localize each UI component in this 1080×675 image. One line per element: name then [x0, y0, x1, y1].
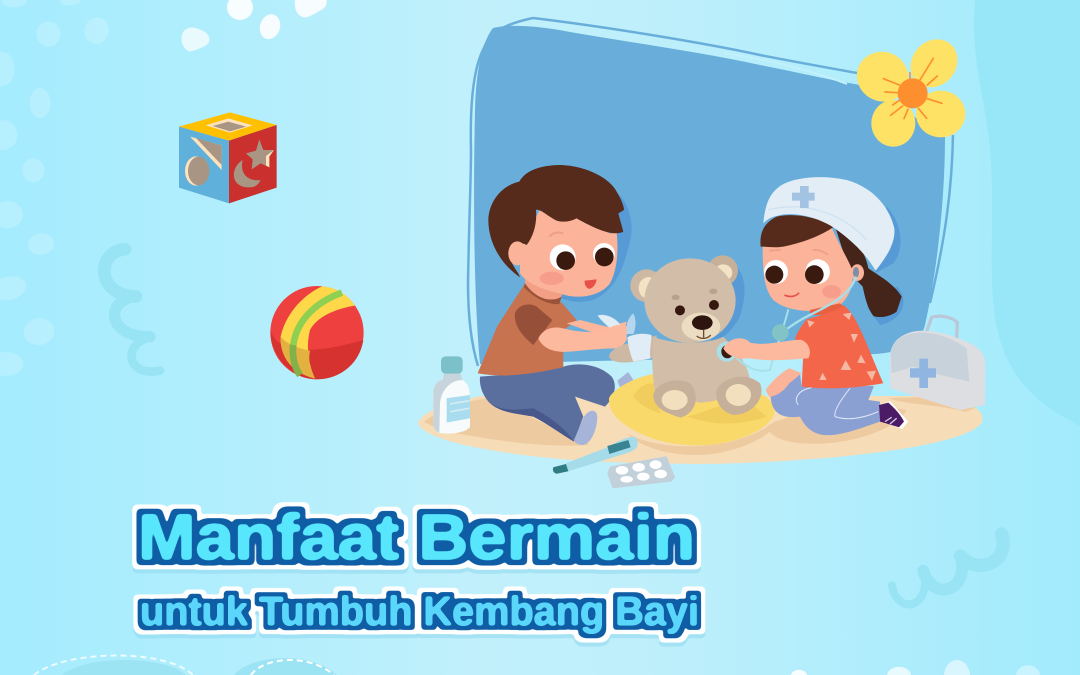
shoe — [879, 401, 908, 429]
head — [644, 258, 736, 343]
title line 2: untuk Tumbuh Kembang Bayi — [140, 588, 699, 634]
floor shadow — [767, 406, 907, 444]
eyebrows — [672, 289, 717, 300]
left foot — [653, 380, 696, 418]
ears — [630, 269, 663, 302]
shirt — [478, 283, 577, 375]
stethoscope disc — [717, 342, 737, 362]
neck — [525, 277, 563, 301]
stethoscope chest piece — [772, 324, 789, 341]
ponytail and back hair — [835, 226, 902, 317]
blue shadow behind hat — [875, 207, 901, 273]
shirt triangles — [807, 313, 876, 381]
far arm — [567, 320, 627, 337]
hand — [600, 325, 627, 348]
ear and earpiece — [851, 264, 864, 281]
eyebrow — [550, 233, 563, 236]
bottom-right dots — [791, 660, 1040, 675]
stethoscope tube front — [783, 277, 856, 332]
hair — [488, 165, 624, 277]
fingers — [723, 338, 750, 357]
hat cross — [792, 186, 815, 208]
toy: striped ball — [270, 286, 364, 379]
pants — [771, 373, 880, 435]
decorative dots: left and top — [0, 0, 327, 376]
fringe — [760, 215, 834, 247]
pants seams — [796, 388, 878, 419]
cheek — [822, 285, 841, 298]
stethoscope tube back — [737, 309, 788, 371]
trouser shading — [488, 402, 574, 442]
muzzle — [682, 313, 720, 341]
bear shadow — [693, 263, 745, 347]
bottom-left bubbles — [34, 655, 337, 675]
toy: shape cube — [179, 112, 277, 203]
body — [652, 337, 750, 403]
nose — [692, 315, 713, 330]
right foot — [716, 377, 761, 415]
first aid kit — [890, 316, 985, 410]
trousers — [480, 364, 615, 442]
squiggle: left — [104, 249, 160, 371]
lower hand — [766, 368, 802, 397]
title line 1: Manfaat Bermain — [138, 501, 695, 573]
hat — [763, 177, 894, 271]
teddy bear — [598, 255, 761, 418]
boy and props — [433, 165, 633, 445]
hat band line — [768, 207, 867, 240]
girl and first aid kit — [717, 177, 985, 444]
ear — [508, 241, 526, 265]
near arm — [538, 327, 626, 352]
mouth — [785, 293, 799, 296]
neck — [810, 303, 847, 315]
sand floor — [418, 396, 983, 464]
yellow cushion — [609, 374, 777, 455]
near sock — [574, 411, 597, 445]
bear arm with bandage — [598, 313, 657, 363]
smile — [697, 330, 711, 338]
medicine bottle — [433, 356, 470, 434]
mouth — [585, 279, 597, 289]
flower — [849, 30, 967, 147]
cheek — [540, 272, 564, 285]
thermometer — [553, 437, 638, 474]
blue shadow behind head — [562, 193, 632, 302]
sleeve shadow — [515, 305, 552, 345]
cushion body — [609, 374, 775, 445]
blue backdrop panel — [468, 18, 953, 366]
face — [763, 227, 853, 311]
eyes — [764, 259, 830, 284]
shirt — [795, 305, 883, 388]
background blob: right edge — [974, 0, 1080, 426]
eyebrows — [770, 250, 827, 254]
blister pack of pills — [608, 457, 674, 487]
eyes — [675, 300, 719, 315]
shadow behind ponytail — [867, 287, 903, 325]
cushion floor shadow — [627, 420, 777, 455]
collar — [524, 283, 562, 304]
face — [520, 210, 617, 297]
far sock — [617, 372, 633, 387]
eyes — [550, 243, 615, 270]
title — [138, 501, 699, 634]
arm — [723, 338, 810, 360]
squiggle: right — [892, 534, 1003, 604]
